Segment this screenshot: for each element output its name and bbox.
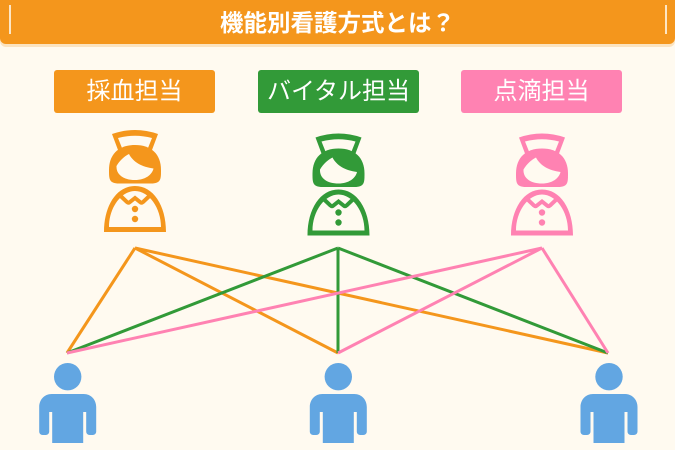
icon: orange nurse bbox=[104, 130, 166, 232]
label: blood draw: 採血担当 bbox=[86, 78, 182, 105]
connection lines: vitals bbox=[67, 248, 608, 353]
connection lines: blood draw bbox=[67, 248, 608, 353]
icon: patient right bbox=[580, 363, 638, 443]
icon: pink nurse bbox=[511, 134, 573, 236]
icon: green nurse bbox=[308, 134, 370, 236]
label: vitals bbox=[258, 70, 419, 113]
label: IV drip: 点滴担当 bbox=[494, 78, 590, 105]
icon: patient left bbox=[39, 363, 96, 443]
label: IV drip bbox=[461, 70, 622, 113]
connection lines: IV drip bbox=[67, 248, 608, 353]
title banner bbox=[0, 0, 675, 47]
label: blood draw bbox=[54, 70, 215, 113]
label: vitals: バイタル担当 bbox=[267, 78, 410, 105]
title: 機能別看護方式とは？ bbox=[220, 10, 455, 36]
icon: patient centre bbox=[310, 363, 367, 443]
